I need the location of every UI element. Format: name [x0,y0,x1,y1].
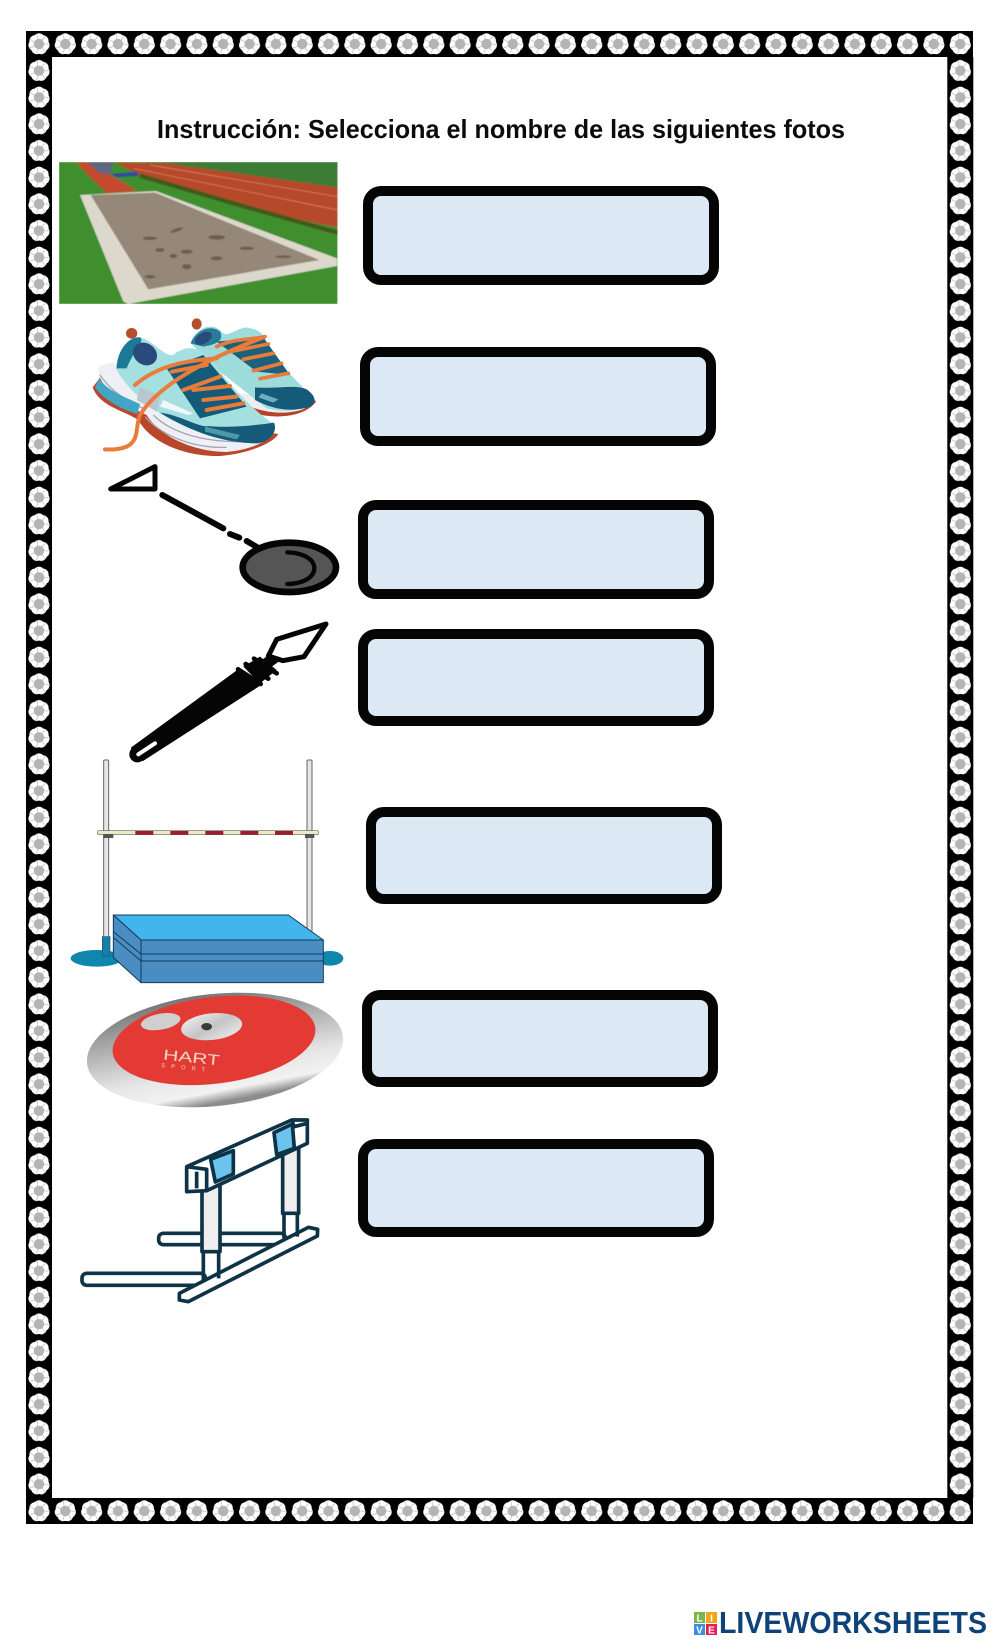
title: instruction: Instrucción: Selecciona el nombre de las siguientes fotos [157,114,845,144]
front shoe [93,328,278,456]
answer box 3 [363,505,709,594]
icon: high jump bar and mat [71,760,343,983]
icon: javelin [129,624,326,762]
logo squares [694,1612,717,1636]
logo squares: L [696,1614,703,1624]
icon: running shoes [93,318,316,456]
icon: hammer throw [111,467,336,592]
logo squares: V [696,1626,703,1636]
answer box 1 [368,191,714,280]
icon: discus [81,981,349,1119]
answer box 2 [365,352,711,441]
answer box 6 [367,995,713,1082]
logo squares: E [708,1626,715,1636]
icon: discus: SPORT [161,1063,211,1074]
icon: discus: HART [163,1048,221,1069]
answer box 4 [363,634,709,721]
logo: liveworksheets [694,1605,987,1640]
logo squares: I [710,1614,713,1624]
answer box 5 [371,812,717,899]
icon: hurdle [82,1120,318,1302]
answer box 7 [363,1144,709,1232]
photo: long jump sand pit [59,162,338,304]
rear shoe [191,318,316,416]
